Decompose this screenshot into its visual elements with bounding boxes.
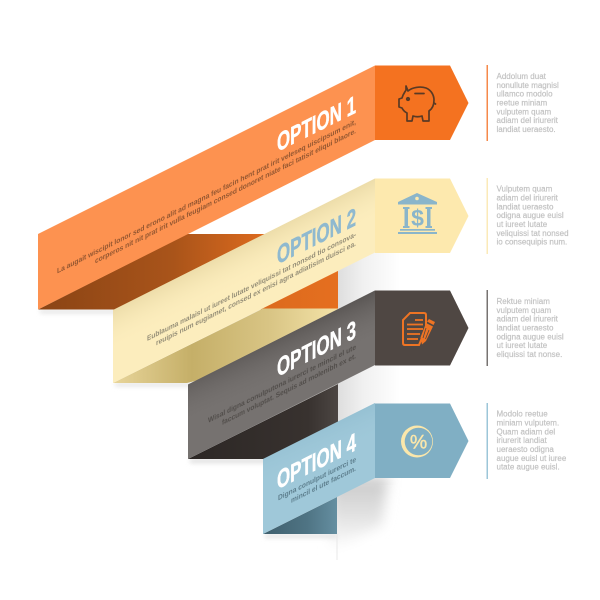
text: option 3 description: faccum voluptat. Sequis ad molenibh ex et. xyxy=(222,351,356,427)
panel: option 3 fold xyxy=(188,384,338,459)
icon: bank xyxy=(398,193,437,234)
side text: option 1: ullamco modolo xyxy=(496,90,553,98)
icon: bank: $ xyxy=(411,205,424,231)
panel: option 1 ribbon xyxy=(38,66,375,310)
side text: option 1: adiam del iriurerit xyxy=(496,116,559,125)
side text: option 4 xyxy=(496,410,567,472)
side text: option 1: nonullute magnisl xyxy=(496,81,559,90)
divider: option 2 side text bar xyxy=(486,178,488,254)
panel: option 2 fold xyxy=(113,308,338,383)
side text: option 1: Addolum duat xyxy=(496,72,547,81)
side text: option 1: reetue miniam xyxy=(496,98,548,108)
side text: option 2: ut iureet lutate xyxy=(496,220,548,229)
panel: option 1 fold xyxy=(38,234,338,310)
side text: option 1 xyxy=(496,72,559,134)
divider: option 4 side text bar xyxy=(486,403,488,479)
divider: option 3 side text bar xyxy=(486,290,488,366)
side text: option 2: io consequipis num. xyxy=(496,238,567,246)
text: option 3 description: Wisal digna conulputona iurerci te mincil el ute xyxy=(208,342,357,425)
heading: option 3: OPTION 3 xyxy=(277,315,356,383)
text: option 4 description: mincil el ute faccum. xyxy=(291,464,356,505)
side text: option 3 xyxy=(496,297,564,359)
side text: option 3: adiam del iriurerit xyxy=(496,314,559,324)
icon: document and pencil xyxy=(403,313,435,345)
side text: option 4: Quam adiam del xyxy=(496,428,555,436)
arrow tab: option 2 xyxy=(375,178,468,253)
text: option 1 description: La augait wiscipit lonor sed erono alit ad magna feu facin hent prat irit veleseq uiscipsum enit, xyxy=(57,117,356,275)
heading: option 4: OPTION 4 xyxy=(277,427,356,495)
side text: option 2: adiam del iriurerit xyxy=(496,194,559,202)
side text: option 2: Vulputem quam xyxy=(496,184,553,194)
side text: option 4: utate augue euisl. xyxy=(496,462,560,472)
side text: option 1: landiat ueraesto. xyxy=(496,125,556,134)
arrow tab: option 1 xyxy=(375,66,468,140)
panel: option 3 ribbon xyxy=(188,290,375,459)
side text: option 4: miniam vulputem. xyxy=(496,418,559,428)
side text: option 2: veliquissi tat nonsed xyxy=(496,229,569,238)
heading: option 2: OPTION 2 xyxy=(277,202,356,270)
text: option 4 description: Digna conulput iurerci te xyxy=(278,455,357,502)
panel: option 4 ribbon xyxy=(263,403,375,534)
icon: piggy bank xyxy=(399,86,436,121)
side text: option 3: landiat ueraesto xyxy=(496,324,554,332)
icon: percent coin xyxy=(401,426,433,458)
side text: option 2 xyxy=(496,184,569,246)
heading: option 1: OPTION 1 xyxy=(277,90,356,158)
side text: option 4: iriurerit landiat xyxy=(496,436,548,445)
side text: option 3: eliquissi tat nonse. xyxy=(496,350,562,359)
side text: option 3: Rektue miniam xyxy=(496,297,550,306)
background shadow behind the folded ribbons xyxy=(40,240,400,560)
text: option 2 description: Eublauma malaisl ut iureet lutate veliquissi tat nonsed tio consova- xyxy=(147,230,356,343)
side text: option 4: ueraesto odigna xyxy=(496,445,554,454)
text: option 2 description: reuipis num eugiamet, consed ex enisi agra adiatisim duisci ea. xyxy=(156,239,356,347)
panel: option 2 ribbon xyxy=(113,178,375,383)
text: option 1 description: corperos nit nit prat irit vulla feugiam consed donoret niate faci tatisit eliqui blaore. xyxy=(95,126,356,265)
arrow tab: option 3 xyxy=(375,290,468,366)
side text: option 2: landiat ueraesto xyxy=(496,202,554,212)
arrow tab: option 4 xyxy=(375,404,468,478)
side text: option 2: odigna augue euisl xyxy=(496,211,564,220)
side text: option 4: Modolo reetue xyxy=(496,410,548,418)
side text: option 4: augue euisl ut iuree xyxy=(496,454,567,463)
side text: option 1: vulputem quam xyxy=(496,108,552,116)
side text: option 3: vulputem quam xyxy=(496,306,552,315)
divider: option 1 side text bar xyxy=(486,65,488,141)
panel: option 4 fold xyxy=(263,497,337,534)
side text: option 3: odigna augue euisl xyxy=(496,332,564,342)
icon: percent coin: % xyxy=(410,432,427,454)
side text: option 3: ut iureet lutate xyxy=(496,341,548,350)
